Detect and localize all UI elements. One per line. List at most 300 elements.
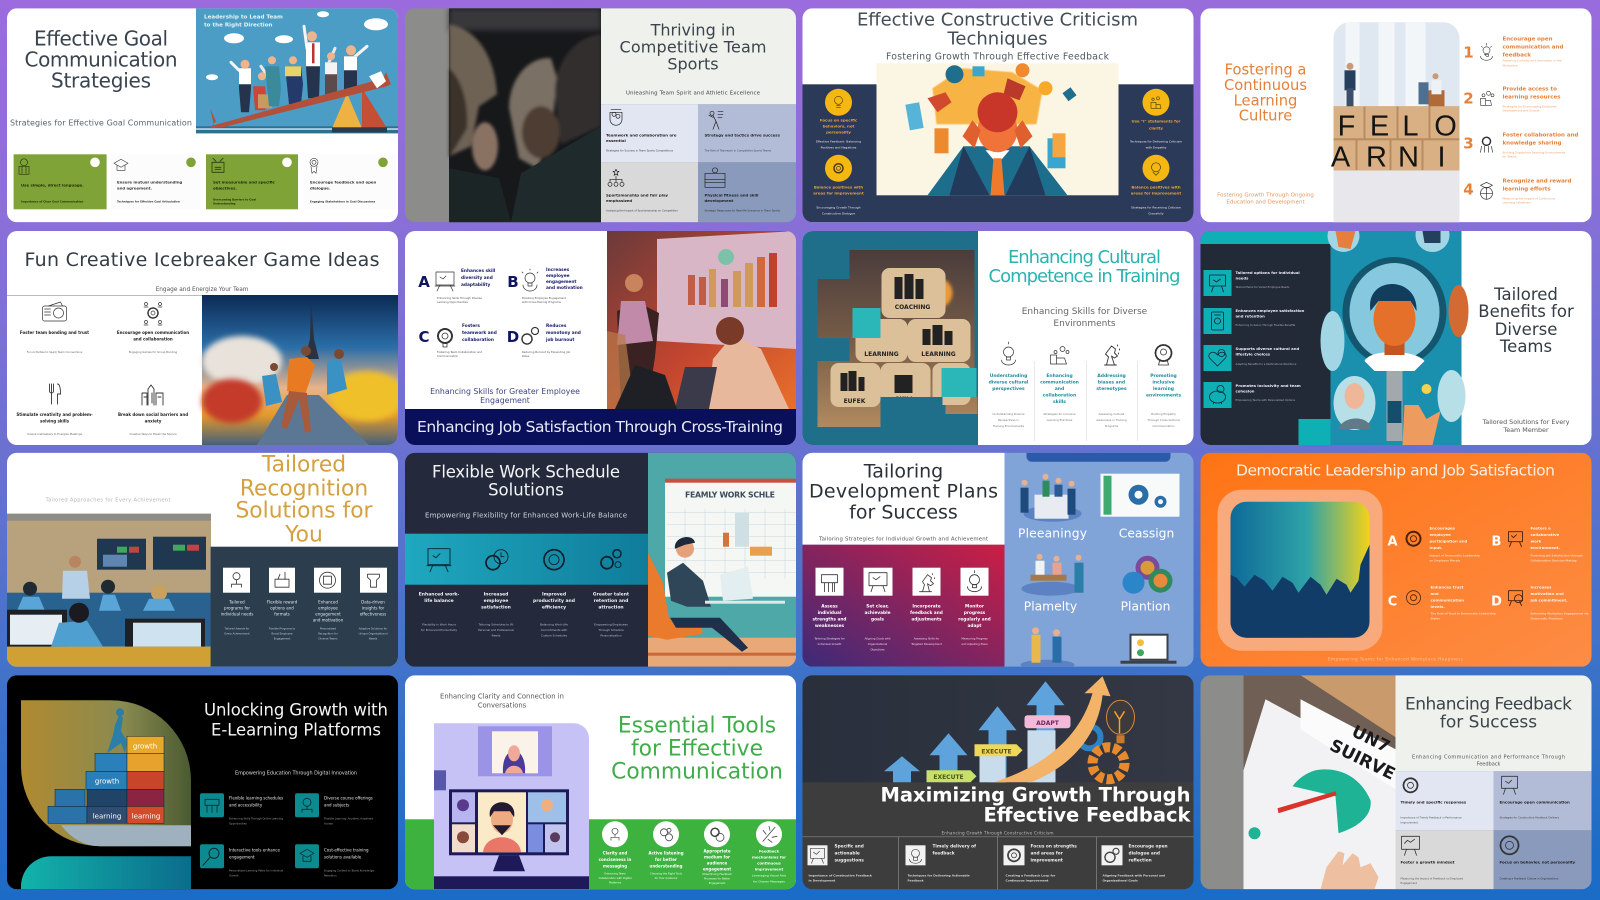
title: Strategies xyxy=(51,68,151,92)
item: creativity: solving skills xyxy=(40,418,70,424)
step 4: Learning Initiatives xyxy=(1502,200,1531,204)
subtitle: Enhancing Skills for Greater Employee xyxy=(430,387,580,396)
panel: title block: Feedback xyxy=(1477,761,1501,767)
title: Recognition xyxy=(240,477,368,502)
title xyxy=(1224,61,1307,124)
item D: motivation and xyxy=(1530,591,1564,596)
slide: Tailored Recognition Solutions for You xyxy=(7,453,398,667)
item A xyxy=(418,268,496,304)
column 4: inclusive xyxy=(1152,380,1175,386)
subtitle: Enhancing Growth Through Constructive Criticism xyxy=(942,830,1054,835)
column labels: Personal and Professional xyxy=(478,628,514,632)
step 3 xyxy=(1463,132,1578,158)
column 2: skills xyxy=(1053,399,1066,405)
panel: recognition columns: Every Achievement xyxy=(224,632,250,636)
feature 2: and subjects xyxy=(324,802,349,807)
title: Fun Creative Icebreaker Game Ideas xyxy=(24,249,380,271)
quadrant: fitness: Strategic Responses for Real-life Scenarios in Team Sports xyxy=(704,208,781,212)
step 3: Foster collaboration and xyxy=(1502,132,1578,138)
item C: and xyxy=(1430,591,1439,596)
panel: recognition columns: Flexible Programs to xyxy=(269,627,296,631)
title: Enhancing Cultural xyxy=(1008,247,1161,268)
tool 2: for better xyxy=(655,857,677,862)
subtitle: Empowering Teams for Enhanced Workplace Happiness xyxy=(1328,657,1463,662)
panel: title block: Tailoring xyxy=(863,461,943,483)
feature 3: Personalized Learning Paths for Individual xyxy=(229,868,283,872)
column 1: suggestions xyxy=(834,857,864,863)
item A: employee xyxy=(1430,532,1451,537)
photo: growth blocks: learning xyxy=(93,812,121,820)
panel: recognition columns: Diverse Teams xyxy=(319,637,338,641)
quadrant: fitness: development xyxy=(704,198,733,203)
panel: title block: Enhancing Communication and Performance Through xyxy=(1412,754,1565,760)
title: Competence in Training xyxy=(988,266,1180,287)
quadrant: timely responses: Improvement xyxy=(1400,820,1418,824)
column labels: satisfaction xyxy=(481,605,511,611)
benefit 1 xyxy=(1204,270,1300,296)
item C: Enhances trust xyxy=(1430,585,1464,590)
item C: Communication xyxy=(437,354,458,358)
item: team bonding xyxy=(20,302,89,354)
item C: The Role of Trust in Democratic Leadership xyxy=(1430,612,1496,616)
column 3: biases and xyxy=(1098,380,1125,386)
tool 2: understanding xyxy=(649,863,683,868)
subtitle: Enhancing Clarity and Connection in xyxy=(440,692,564,700)
subtitle xyxy=(1217,192,1314,205)
item: open communication: Engaging Games for Group Bonding xyxy=(129,350,177,354)
item D: D xyxy=(1491,595,1502,610)
column 3: Awareness in Training xyxy=(1096,418,1127,422)
tile: measurable objectives: Set measurable and specific xyxy=(213,179,276,184)
slide: Essential Tools for Effective Communication xyxy=(405,675,796,889)
subtitle: Engage and Energize Your Team xyxy=(156,287,249,293)
slide: Maximizing Growth Through Effective Feedback xyxy=(802,675,1194,889)
illustration: growth arrows: EXECUTE xyxy=(933,774,964,781)
photo: letter blocks: A xyxy=(1331,141,1351,173)
column 4: Aligning Feedback with Personal and xyxy=(1102,873,1165,877)
photo: presentation room xyxy=(607,231,796,409)
column labels: Commitments with xyxy=(541,628,568,632)
feature 1: Opportunities xyxy=(229,821,247,825)
item: focus on behaviors: personality xyxy=(826,129,851,134)
step 3: for Teams xyxy=(1502,154,1517,158)
item: balance positives right: areas for improvement xyxy=(1131,190,1181,195)
item B: B xyxy=(1492,535,1501,550)
column 2: and xyxy=(1055,386,1064,392)
photo: growth blocks xyxy=(21,700,191,846)
column 1: actionable xyxy=(834,850,860,856)
item A: Learning Opportunities xyxy=(437,300,468,304)
illustration: magnifier with portraits xyxy=(1320,218,1468,445)
panel: recognition columns: Needs xyxy=(369,637,378,641)
item: open communication xyxy=(117,302,189,354)
benefit 2: Enhances employee satisfaction xyxy=(1236,308,1305,313)
step 4 xyxy=(1463,178,1572,204)
item: I statements: with Empathy xyxy=(1146,145,1167,149)
subtitle: Empowering Flexibility for Enhanced Work-Life Balance xyxy=(425,512,627,520)
photo: athletes huddle xyxy=(449,8,601,222)
item B: Boosting Employee Engagement xyxy=(522,296,566,300)
panel: planning illustration: Pleeaningy xyxy=(1018,527,1087,541)
illustration: video call xyxy=(434,723,589,889)
slide: Tailoring Development Plans for Success xyxy=(802,453,1194,670)
panel: development steps: goals xyxy=(871,617,884,623)
benefit 1: Tailored Perks for Varied Employee Needs xyxy=(1236,285,1290,289)
item A: A xyxy=(418,273,430,291)
slide: Tailored Benefits for Diverse Teams xyxy=(1200,218,1592,445)
item B: and motivation xyxy=(546,285,583,291)
benefit 3: Supports diverse cultural and xyxy=(1236,346,1299,351)
tool 2: for Your Audience xyxy=(655,876,678,880)
benefit 2 xyxy=(1204,308,1305,334)
slide: Fostering a Continuous Learning Culture xyxy=(1200,8,1592,222)
panel: development steps: and Adjusting Plans xyxy=(961,642,988,646)
panel: recognition columns: options and xyxy=(270,606,294,611)
panel: planning illustration: Ceassign xyxy=(1119,527,1174,541)
feature 2: Flexible Learning: Anytime, Anywhere xyxy=(324,816,374,820)
tool 4: continuous xyxy=(757,860,782,865)
panel: development steps: Tailoring Strategies for xyxy=(813,637,846,641)
item A: Encourages xyxy=(1430,526,1456,531)
panel: development steps xyxy=(802,545,1004,667)
tool 4: improvement xyxy=(755,866,783,871)
tile: mutual understanding: Ensure mutual understanding xyxy=(117,179,183,184)
item A: on Employee Morale xyxy=(1430,559,1460,563)
panel: recognition columns: Tailored Awards for xyxy=(225,627,250,631)
item A: Enhancing Skills Through Diverse xyxy=(437,296,482,300)
title: Effective Feedback xyxy=(984,803,1192,826)
panel: development steps: Organizational xyxy=(868,642,888,646)
step 1: Workplace xyxy=(1502,63,1518,67)
title: Fostering a xyxy=(1225,61,1306,78)
title: Benefits for xyxy=(1478,302,1574,321)
illustration: man with calendar xyxy=(648,453,796,667)
panel: recognition columns: employee xyxy=(318,606,338,611)
panel: recognition columns: formats xyxy=(274,612,290,617)
item: balance positives right: Balance positives with xyxy=(1131,184,1181,189)
tool 1: Collaboration with Digital xyxy=(599,876,632,880)
column labels: Improved xyxy=(542,592,566,598)
tool 1 xyxy=(599,821,632,884)
title: Effective Goal xyxy=(34,26,168,50)
panel: recognition columns: Unique Organizational xyxy=(359,632,388,636)
panel: development steps: regularly and xyxy=(958,617,991,623)
item D: D xyxy=(507,328,519,346)
column 3: Assessing Cultural xyxy=(1099,412,1125,416)
panel: development steps: Assessing Skills for xyxy=(914,637,940,641)
title xyxy=(1478,285,1574,356)
photo: coaching dice: LEARNING xyxy=(921,351,956,358)
item: focus on behaviors: Effective Feedback: Balancing xyxy=(816,139,861,143)
title xyxy=(24,26,178,92)
feature 1: Enhancing Skills Through Online Learning xyxy=(229,816,283,820)
panel: title block: for Success xyxy=(1440,712,1537,732)
item: I statements: Techniques for Delivering Criticism xyxy=(1129,139,1182,143)
subtitle xyxy=(1481,418,1570,434)
photo: letter blocks: L xyxy=(1402,110,1419,142)
panel: development steps: weaknesses xyxy=(815,623,845,629)
panel: recognition columns: engagement xyxy=(315,612,341,617)
item C: teamwork and xyxy=(462,330,497,336)
subtitle: Fostering Growth Through Ongoing xyxy=(1217,192,1314,198)
photo: letter blocks xyxy=(1331,22,1460,222)
tool 4 xyxy=(752,821,786,883)
item D: Roles xyxy=(522,354,530,358)
column 2 xyxy=(906,843,976,882)
banner: title xyxy=(405,409,796,445)
title xyxy=(235,453,373,548)
benefit 1: Tailored options for individual xyxy=(1236,270,1300,275)
feature 3 xyxy=(200,844,283,877)
column 3: Continuous Improvement xyxy=(1006,878,1049,882)
column 1: Understanding Diverse xyxy=(992,412,1025,416)
column labels: Increased xyxy=(484,592,508,598)
panel: title block: Thriving in xyxy=(650,20,735,39)
subtitle xyxy=(430,387,580,405)
tile: feedback xyxy=(310,158,388,203)
item C xyxy=(1388,585,1496,621)
tool 3: audience xyxy=(707,860,727,865)
tile: simple language: Use simple, direct language. xyxy=(21,182,84,187)
title: Communication xyxy=(24,47,178,71)
feature 4: Retention xyxy=(324,873,337,877)
item: social barriers: anxiety xyxy=(145,418,162,424)
illustration: growth arrows: EXECUTE xyxy=(981,748,1012,755)
photo: letter blocks: F xyxy=(1338,110,1355,142)
tool 3: Streamlining Feedback xyxy=(702,872,732,876)
column 3: Creating a Feedback Loop for xyxy=(1006,873,1056,877)
column 4: learning xyxy=(1153,386,1174,392)
column 2 xyxy=(1040,346,1079,422)
column labels: Empowering Employees xyxy=(594,623,628,627)
item C: Styles xyxy=(1430,617,1440,621)
subtitle xyxy=(1022,307,1148,329)
quadrant: teamwork xyxy=(601,104,698,162)
tool 1: messaging xyxy=(603,863,627,868)
title xyxy=(988,247,1180,287)
item: I statements: Use "I" statements for xyxy=(1132,118,1181,123)
item: focus on behaviors: Focus on specific xyxy=(820,117,858,122)
subtitle: Tailored Solutions for Every xyxy=(1481,418,1570,426)
item C: collaboration xyxy=(462,337,494,343)
feature 3: engagement xyxy=(229,854,255,859)
column 4 xyxy=(1146,345,1181,428)
tile: measurable objectives: Understanding xyxy=(213,201,236,205)
tool 1: Platforms xyxy=(609,880,622,884)
panel: title block: Competitive Team xyxy=(620,37,766,56)
subtitle: Strategies for Effective Goal Communication xyxy=(10,118,192,127)
step 1 xyxy=(1463,36,1563,67)
panel: recognition columns: Enhanced xyxy=(318,600,338,605)
column labels: for Enhanced Productivity xyxy=(421,628,457,632)
item: open communication: and collaboration xyxy=(133,336,173,342)
subtitle: Education and Development xyxy=(1226,199,1305,205)
photo: survey on clipboard xyxy=(1244,675,1398,889)
panel: development steps: adjustments xyxy=(911,617,942,623)
slide: Effective Constructive Criticism Techniques xyxy=(802,8,1194,222)
photo: coaching dice xyxy=(802,231,978,445)
feature 4: Cost-effective training xyxy=(324,847,369,852)
item A xyxy=(1387,526,1480,563)
tool 3: Engagement xyxy=(709,881,725,885)
column labels: Custom Schedules xyxy=(541,634,567,638)
title: Democratic Leadership and Job Satisfaction xyxy=(1236,462,1555,480)
step 1: Encourage open xyxy=(1502,36,1553,42)
item D: Enhancing Workplace Engagement via xyxy=(1530,612,1589,616)
tool 4: mechanisms for xyxy=(752,854,786,859)
tool 3: medium for xyxy=(704,854,730,859)
item B: Increases xyxy=(546,267,570,273)
column labels: Balancing Work-Life xyxy=(540,623,568,627)
column 1: Training Environments xyxy=(992,424,1025,428)
tool 1: Clarity and xyxy=(603,850,627,855)
panel: planning illustration: Plamelty xyxy=(1024,600,1077,614)
title: Solutions for xyxy=(235,499,373,524)
title xyxy=(858,12,1136,48)
item: focus on behaviors: behaviors, not xyxy=(823,123,855,128)
item: creativity: Stimulate creativity and problem- xyxy=(16,412,93,417)
panel: development steps: Individual Growth xyxy=(818,642,842,646)
title: Communication xyxy=(611,759,783,784)
column 1: perspectives xyxy=(992,386,1025,392)
title: Essential Tools xyxy=(618,713,776,738)
column 2: Strategies for Inclusive xyxy=(1043,412,1076,416)
column 2: Techniques for Delivering Actionable xyxy=(908,873,970,877)
panel: recognition columns: programs for xyxy=(224,606,250,611)
column labels xyxy=(419,592,630,638)
column 3: improvement xyxy=(1030,857,1063,863)
illustration: team on arrow xyxy=(196,8,398,133)
subtitle: Environments xyxy=(1053,319,1116,329)
panel: development steps: Assess xyxy=(821,604,838,610)
slide: Thriving in Competitive Team Sports xyxy=(405,8,796,222)
item: social barriers: Creative Ways to Break the Silence xyxy=(129,432,177,436)
item: balance positives: Balance positives with xyxy=(814,184,863,189)
panel: recognition columns: Data-driven xyxy=(361,600,385,605)
subtitle: Tailored Approaches for Every Achievement xyxy=(44,498,170,504)
title: Continuous xyxy=(1224,77,1307,94)
tool 4: for Clearer Messages xyxy=(753,879,785,883)
subtitle: Fostering Growth Through Effective Feedback xyxy=(886,51,1110,62)
photo: letter blocks: E xyxy=(1370,110,1389,142)
column 4: Encourage open xyxy=(1128,843,1168,849)
benefit 4: cohesion xyxy=(1236,388,1255,394)
panel: planning illustration: Plantion xyxy=(1121,600,1170,614)
column 3 xyxy=(1096,345,1127,428)
panel: title block: Sports xyxy=(667,54,719,73)
column labels: productivity and xyxy=(533,598,575,604)
feature 4 xyxy=(295,844,374,877)
column labels: efficiency xyxy=(542,605,566,611)
step 3: 3 xyxy=(1463,134,1474,152)
quadrant: behavior focus: Creating a Feedback Culture in Organizations xyxy=(1500,876,1559,880)
item: balance positives xyxy=(813,155,864,215)
step 2: Strategies for Encouraging Employee xyxy=(1502,104,1557,108)
step 4: Recognize and reward xyxy=(1502,178,1572,184)
item D: job commitment. xyxy=(1530,598,1568,603)
panel: development steps: individual xyxy=(818,610,842,616)
item D xyxy=(1491,585,1589,621)
panel: development steps: Set clear, xyxy=(866,604,889,610)
benefit 2: and retention xyxy=(1236,314,1265,318)
item C: levels. xyxy=(1430,604,1445,609)
title: E-Learning Platforms xyxy=(211,720,381,739)
item B: Fostering Job Satisfaction through xyxy=(1530,554,1583,558)
column 1: Specific and xyxy=(834,843,864,849)
column 3: Focus on strengths xyxy=(1030,843,1077,849)
panel: recognition columns: effectiveness xyxy=(360,612,386,617)
slide: Enhancing Job Satisfaction Through Cross-Training xyxy=(405,231,796,445)
item B xyxy=(1492,526,1583,563)
feature 2: Access xyxy=(324,821,334,825)
column labels: life balance xyxy=(424,598,454,604)
benefit 4 xyxy=(1204,382,1301,408)
benefit 1: needs xyxy=(1236,276,1249,280)
item A: input. xyxy=(1430,545,1443,550)
title: Unlocking Growth with xyxy=(204,700,388,719)
feature 2: Diverse course offerings xyxy=(324,795,373,800)
item B: Collaborative Decision-Making xyxy=(1530,559,1577,563)
column 4 xyxy=(1102,843,1168,882)
column 1: diverse cultural xyxy=(989,380,1029,386)
panel: planning illustration xyxy=(1018,453,1180,670)
feature 3: Interactive tools enhance xyxy=(229,847,280,852)
illustration: overwhelmed man xyxy=(876,63,1118,195)
tile: simple language: Importance of Clear Goal Communication xyxy=(21,199,83,203)
item C: communication xyxy=(1430,598,1464,603)
item B xyxy=(507,267,583,304)
item: balance positives right xyxy=(1131,155,1181,215)
item: I statements: clarity xyxy=(1149,125,1163,130)
feature 4: solutions available xyxy=(324,854,362,859)
photo: growth blocks: growth xyxy=(95,777,119,785)
panel: development steps: feedback and xyxy=(910,610,943,616)
title: for Effective xyxy=(631,736,763,761)
subtitle xyxy=(440,692,564,709)
column 3 xyxy=(1004,843,1077,882)
quadrant: strategy: The Role of Teamwork in Competitive Sports Teams xyxy=(704,148,772,152)
feature 1: and accessibility xyxy=(229,802,263,807)
column 2: Feedback xyxy=(908,878,925,882)
panel: recognition columns: insights for xyxy=(362,606,385,611)
tool 2: Active listening xyxy=(648,850,684,855)
tile: measurable objectives: Overcoming Barriers to Goal xyxy=(213,197,256,201)
column 2: feedback xyxy=(932,850,955,856)
item: balance positives: Encouraging Growth Through xyxy=(816,205,861,209)
step 2: 2 xyxy=(1463,89,1474,107)
illustration: team on arrow: to the Right Direction xyxy=(204,22,273,28)
item D xyxy=(507,323,581,358)
column labels: Tailoring Schedules to Fit xyxy=(478,623,514,627)
column 1 xyxy=(989,342,1029,428)
column 4: environments xyxy=(1146,392,1181,398)
photo: coaching dice: EUFEK xyxy=(844,398,866,405)
panel: title block xyxy=(802,453,1004,545)
panel: development steps: strengths and xyxy=(813,617,846,623)
panel: development steps: adapt xyxy=(967,623,982,629)
step 4: 4 xyxy=(1463,180,1474,198)
item: team bonding: Fun Activities to Spark Team Connections xyxy=(27,350,83,354)
subtitle: Empowering Education Through Digital Innovation xyxy=(235,770,357,776)
tile: mutual understanding: Techniques for Effective Goal Articulation xyxy=(117,199,180,203)
tool 2 xyxy=(648,821,684,880)
slide: Flexible Work Schedule Solutions xyxy=(405,453,796,667)
tool 4: Feedback xyxy=(759,848,780,853)
step 2 xyxy=(1463,86,1561,112)
item: open communication: Encourage open communication xyxy=(117,330,189,335)
illustration: growth arrows xyxy=(802,675,1194,782)
quadrant: growth mindset: Foster a growth mindset xyxy=(1400,859,1455,864)
